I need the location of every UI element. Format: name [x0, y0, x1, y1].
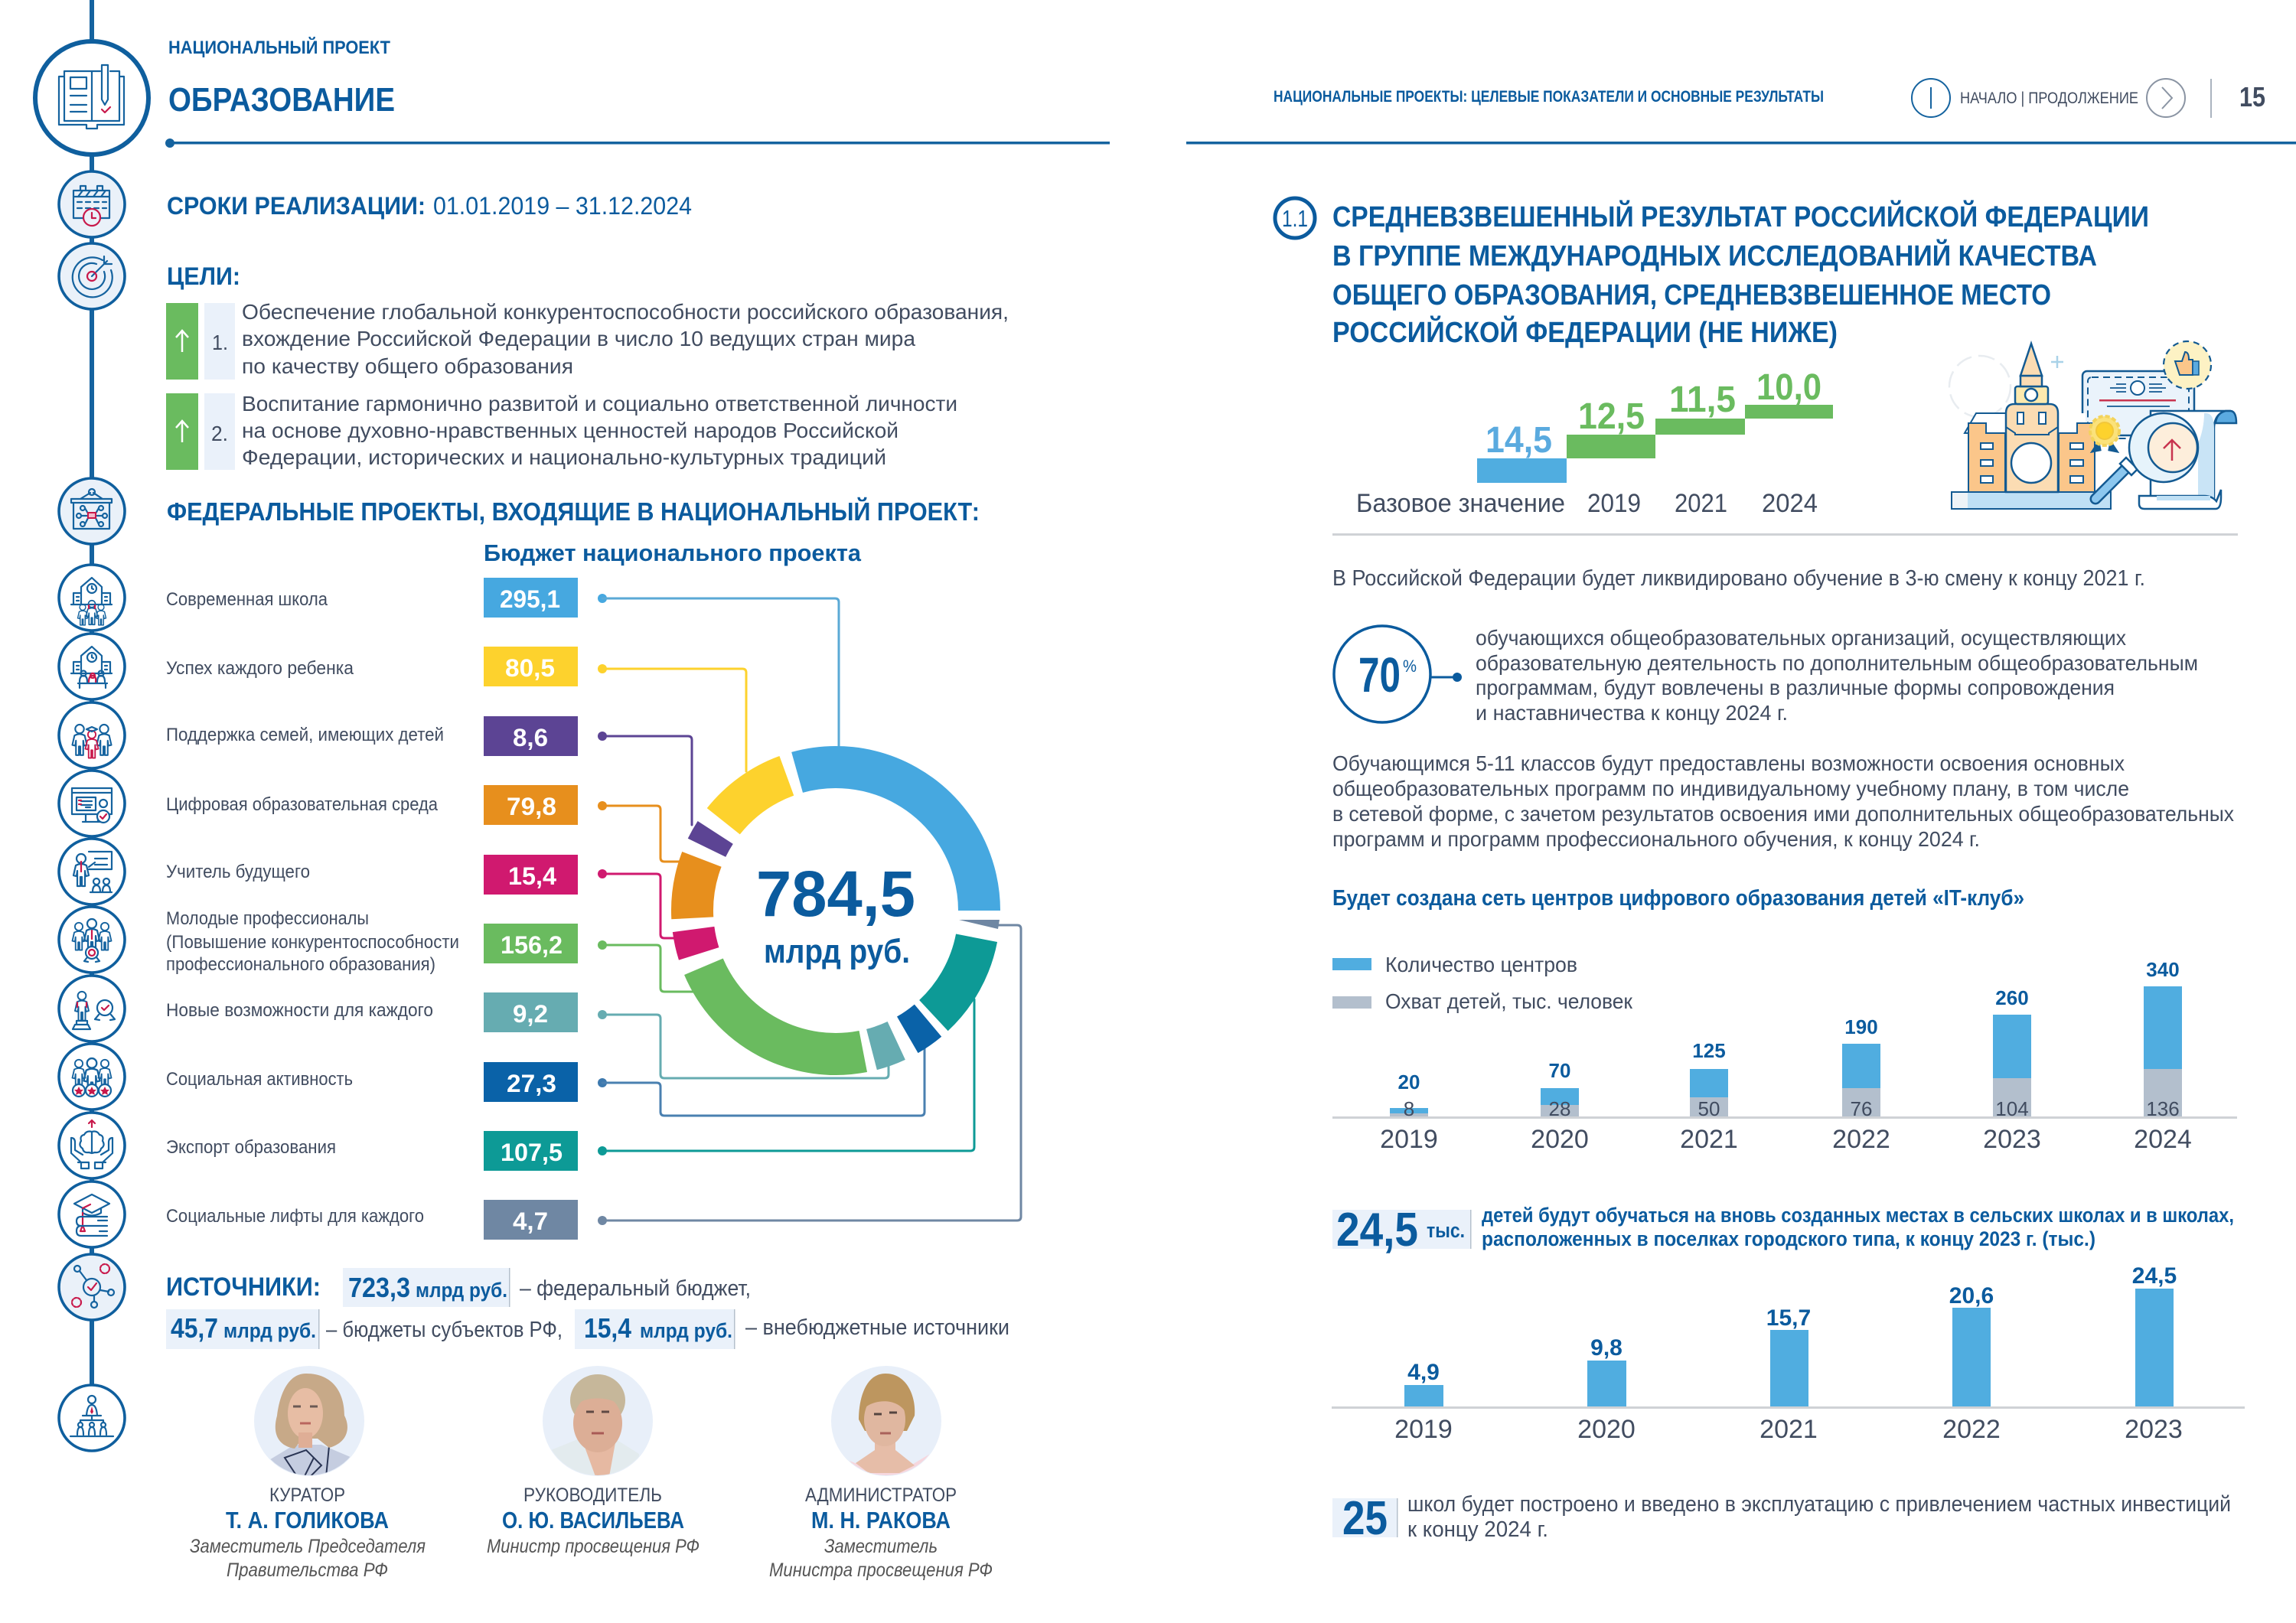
curator caption: КУРАТОР — [269, 1484, 345, 1506]
text: individual curriculum: общеобразовательных программ по индивидуальному учебному плану, в том числе — [1332, 777, 2129, 800]
icon: school with children at table — [59, 634, 125, 699]
curator caption: Правительства РФ — [227, 1559, 388, 1581]
implementation period — [167, 192, 692, 220]
project names: Успех каждого ребенка — [166, 658, 354, 679]
text: individual curriculum: в сетевой форме, с зачетом результатов освоения ими дополнительных общеобразовательных — [1332, 802, 2234, 826]
callout: 24.5 thousand children: расположенных в поселках городского типа, к концу 2023 г. (тыс.) — [1482, 1227, 2095, 1250]
source: regional budgets: млрд руб. — [223, 1319, 316, 1342]
portrait: administrator — [831, 1366, 941, 1476]
budget value boxes: 80,5 — [505, 654, 555, 682]
stacked bar chart: IT-club: 8 — [1404, 1097, 1414, 1120]
callout: 25 schools: к концу 2024 г. — [1407, 1517, 1548, 1542]
header: national project label: НАЦИОНАЛЬНЫЙ ПРОЕКТ — [168, 37, 390, 58]
text: individual curriculum: Обучающимся 5-11 классов будут предоставлены возможности освоения основных — [1332, 751, 2125, 775]
staircase chart: 11,5 — [1669, 380, 1736, 420]
project names: Поддержка семей, имеющих детей — [166, 725, 444, 745]
page number — [2210, 79, 2265, 118]
icon: calendar and clock — [59, 171, 125, 237]
icon: sources network — [59, 1254, 125, 1320]
goal 1 — [166, 300, 1009, 380]
staircase chart: Базовое значение — [1356, 489, 1565, 518]
stacked bar chart: IT-club: 2020 — [1531, 1125, 1589, 1154]
legend — [1332, 953, 1633, 1013]
icon: family with graduate — [59, 702, 125, 768]
callout: 70 percent: 70 — [1358, 647, 1401, 702]
indicator heading — [1332, 199, 2149, 349]
bar chart: rural school places: 20,6 — [1949, 1283, 1994, 1309]
project names: Современная школа — [166, 589, 328, 610]
indicator heading: СРЕДНЕВЗВЕШЕННЫЙ РЕЗУЛЬТАТ РОССИЙСКОЙ ФЕДЕРАЦИИ — [1332, 199, 2149, 233]
stacked bar chart: IT-club: 2021 — [1680, 1125, 1738, 1154]
source: federal budget — [343, 1268, 751, 1307]
project names: Экспорт образования — [166, 1137, 336, 1158]
callout: 70 percent — [1334, 626, 1462, 722]
bar chart: rural school places: 2021 — [1760, 1415, 1818, 1444]
head caption — [487, 1484, 700, 1557]
divider under indicator — [1332, 533, 2238, 536]
bar chart: rural school places: 2023 — [2125, 1415, 2183, 1444]
budget heading: Бюджет национального проекта — [484, 539, 862, 566]
text: third shift elimination: В Российской Федерации будет ликвидировано обучение в 3-ю смену к концу 2021 г. — [1332, 566, 2145, 591]
source: extra-budgetary: 15,4 — [584, 1312, 631, 1344]
administrator caption: Заместитель — [824, 1536, 938, 1557]
project names: Учитель будущего — [166, 862, 310, 882]
staircase chart: 2019 — [1587, 489, 1641, 518]
source: extra-budgetary: – внебюджетные источники — [745, 1315, 1009, 1340]
bar chart: rural school places: 2019 — [1394, 1415, 1453, 1444]
budget value boxes: 156,2 — [501, 931, 563, 959]
goal 1: вхождение Российской Федерации в число 10 ведущих стран мира — [242, 327, 915, 350]
icon: presentation board — [59, 478, 125, 544]
stacked bar chart: IT-club: 125 — [1692, 1039, 1726, 1062]
icon: target with dart — [59, 243, 125, 309]
stacked bar chart: IT-club: 76 — [1851, 1097, 1872, 1120]
budget value boxes: 79,8 — [507, 793, 556, 820]
donut total: млрд руб. — [764, 933, 910, 970]
budget value boxes: 9,2 — [513, 1000, 548, 1028]
staircase chart: 12,5 — [1578, 396, 1645, 437]
sources heading: ИСТОЧНИКИ: — [166, 1273, 321, 1302]
administrator caption: Министра просвещения РФ — [769, 1559, 993, 1581]
source: federal budget: – федеральный бюджет, — [520, 1276, 751, 1301]
callout: 24.5 thousand children: тыс. — [1427, 1219, 1465, 1242]
bar chart: rural school places: 15,7 — [1766, 1305, 1811, 1331]
stacked bar chart: IT-club: 70 — [1549, 1059, 1570, 1082]
donut chart — [634, 709, 1038, 1113]
text: mentoring: обучающихся общеобразовательных организаций, осуществляющих — [1476, 626, 2126, 650]
text: mentoring: образовательную деятельность по дополнительным общеобразовательным — [1476, 651, 2198, 675]
source: extra-budgetary: млрд руб. — [640, 1319, 732, 1342]
callout: 70 percent: % — [1403, 657, 1417, 676]
source: regional budgets: 45,7 — [171, 1312, 218, 1344]
source: regional budgets — [166, 1309, 563, 1349]
goal 1: 1. — [212, 331, 228, 354]
stacked bar chart: IT-club: 20 — [1398, 1071, 1420, 1093]
head caption: О. Ю. ВАСИЛЬЕВА — [502, 1507, 684, 1533]
budget value boxes: 295,1 — [500, 585, 560, 613]
bar chart: rural school places: 24,5 — [2132, 1263, 2177, 1289]
page number: 15 — [2239, 81, 2265, 112]
project names: Социальная активность — [166, 1069, 353, 1090]
icon: open book and pen — [35, 41, 148, 155]
indicator heading: РОССИЙСКОЙ ФЕДЕРАЦИИ (НЕ НИЖЕ) — [1332, 314, 1838, 349]
budget value boxes — [484, 578, 578, 1240]
stacked bar chart: IT-club: 2019 — [1380, 1125, 1438, 1154]
implementation period: 01.01.2019 – 31.12.2024 — [433, 192, 692, 220]
budget value boxes: 4,7 — [513, 1207, 548, 1235]
goal 1: Обеспечение глобальной конкурентоспособности российского образования, — [242, 300, 1009, 324]
curator caption — [190, 1484, 426, 1581]
text: mentoring: программам, будут вовлечены в различные формы сопровождения — [1476, 676, 2115, 699]
icon: digital monitor — [59, 771, 125, 836]
head caption: РУКОВОДИТЕЛЬ — [523, 1484, 662, 1506]
staircase chart: 2024 — [1762, 489, 1818, 518]
bar chart: rural school places: 2022 — [1942, 1415, 2001, 1444]
callout: 25 schools — [1332, 1492, 2231, 1545]
stacked bar chart: IT-club: 28 — [1549, 1097, 1570, 1120]
stacked bar chart: IT-club: 50 — [1698, 1097, 1720, 1120]
staircase chart: 2021 — [1675, 489, 1727, 518]
portrait: curator — [254, 1366, 364, 1476]
budget value boxes: 107,5 — [501, 1139, 563, 1166]
federal projects heading: ФЕДЕРАЛЬНЫЕ ПРОЕКТЫ, ВХОДЯЩИЕ В НАЦИОНАЛЬНЫЙ ПРОЕКТ: — [167, 497, 980, 526]
project names — [166, 589, 459, 1227]
project names: (Повышение конкурентоспособности — [166, 932, 459, 953]
bar chart: rural school places: 9,8 — [1590, 1335, 1623, 1361]
indicator heading: В ГРУППЕ МЕЖДУНАРОДНЫХ ИССЛЕДОВАНИЙ КАЧЕСТВА — [1332, 238, 2097, 272]
legend: Охват детей, тыс. человек — [1385, 989, 1633, 1013]
text: mentoring — [1476, 626, 2198, 725]
stacked bar chart: IT-club: 2022 — [1832, 1125, 1890, 1154]
budget value boxes: 27,3 — [507, 1070, 556, 1097]
source: regional budgets: – бюджеты субъектов РФ, — [326, 1318, 563, 1342]
stacked bar chart: IT-club — [1332, 958, 2237, 1154]
curator caption: Т. А. ГОЛИКОВА — [226, 1507, 389, 1533]
project names: профессионального образования) — [166, 954, 435, 975]
staircase chart — [1356, 367, 1833, 518]
goal 2: Воспитание гармонично развитой и социально ответственной личности — [242, 392, 957, 416]
icon: person on steps with badge — [59, 976, 125, 1041]
callout: 25 schools: 25 — [1342, 1492, 1388, 1545]
indicator heading: ОБЩЕГО ОБРАЗОВАНИЯ, СРЕДНЕВЗВЕШЕННОЕ МЕСТО — [1332, 279, 2051, 311]
icon: team hierarchy — [59, 1385, 125, 1451]
budget value boxes: 15,4 — [508, 862, 556, 890]
stacked bar chart: IT-club: 2023 — [1983, 1125, 2041, 1154]
bar chart: rural school places: 4,9 — [1407, 1360, 1440, 1385]
project names: Цифровая образовательная среда — [166, 794, 439, 815]
budget value boxes: 8,6 — [513, 724, 548, 751]
administrator caption: М. Н. РАКОВА — [811, 1507, 951, 1533]
goal 1: по качеству общего образования — [242, 354, 573, 378]
staircase chart: 10,0 — [1756, 367, 1821, 408]
icon: hands holding brain — [59, 1113, 125, 1178]
source: federal budget: 723,3 — [348, 1272, 410, 1303]
icon: school with pupils — [59, 565, 125, 631]
donut total: 784,5 — [756, 858, 915, 930]
bar chart: rural school places — [1332, 1263, 2245, 1444]
goal 2: Федерации, исторических и национально-культурных традиций — [242, 445, 886, 469]
left navigation spine with icons — [35, 0, 148, 1451]
project names: Молодые профессионалы — [166, 908, 369, 929]
right page running header: НАЦИОНАЛЬНЫЕ ПРОЕКТЫ: ЦЕЛЕВЫЕ ПОКАЗАТЕЛИ И ОСНОВНЫЕ РЕЗУЛЬТАТЫ — [1274, 88, 1824, 106]
head caption: Министр просвещения РФ — [487, 1536, 700, 1557]
title: ОБРАЗОВАНИЕ — [168, 81, 395, 119]
stacked bar chart: IT-club: 136 — [2146, 1097, 2180, 1120]
text: individual curriculum: программ и программ профессионального обучения, к концу 2024 г. — [1332, 827, 1980, 851]
connector lines — [598, 594, 1021, 1225]
source: federal budget: млрд руб. — [416, 1279, 507, 1302]
donut total — [756, 858, 915, 970]
project names: Новые возможности для каждого — [166, 1000, 433, 1021]
IT-club chart heading: Будет создана сеть центров цифрового образования детей «IT-клуб» — [1332, 886, 2024, 911]
goal 2 — [166, 392, 957, 470]
indicator number badge: 1.1 — [1282, 205, 1308, 232]
callout: 24.5 thousand children: 24,5 — [1336, 1204, 1418, 1256]
callout: 24.5 thousand children — [1332, 1204, 2234, 1256]
icon: teacher at board — [59, 839, 125, 904]
stacked bar chart: IT-club: 260 — [1995, 986, 2029, 1009]
curator caption: Заместитель Председателя — [190, 1536, 426, 1557]
icon: group with stars — [59, 1044, 125, 1110]
stacked bar chart: IT-club: 2024 — [2134, 1125, 2192, 1154]
administrator caption: АДМИНИСТРАТОР — [805, 1484, 957, 1506]
text: mentoring: и наставничества к концу 2024 г. — [1476, 701, 1788, 725]
bar chart: rural school places: 2020 — [1577, 1415, 1636, 1444]
portrait: head — [543, 1366, 653, 1476]
administrator caption — [769, 1484, 993, 1581]
header rule left — [165, 139, 1110, 148]
source: extra-budgetary — [575, 1309, 1009, 1349]
indicator number badge — [1275, 198, 1315, 238]
legend: Количество центров — [1385, 953, 1577, 976]
stacked bar chart: IT-club: 104 — [1995, 1097, 2029, 1120]
stacked bar chart: IT-club: 190 — [1844, 1015, 1878, 1038]
icon: graduation cap on books — [59, 1181, 125, 1247]
icon: group with award — [59, 907, 125, 973]
navigation: start and continue — [1912, 79, 2185, 117]
project names: Социальные лифты для каждого — [166, 1206, 424, 1227]
goals heading: ЦЕЛИ: — [167, 262, 240, 290]
stacked bar chart: IT-club: 340 — [2146, 958, 2180, 981]
callout: 25 schools: школ будет построено и введено в эксплуатацию с привлечением частных инвестиций — [1407, 1492, 2231, 1517]
goal 2: 2. — [211, 422, 228, 445]
illustration: university, diploma, magnifier — [1949, 341, 2236, 509]
text: individual curriculum — [1332, 751, 2234, 851]
implementation period: СРОКИ РЕАЛИЗАЦИИ: — [167, 192, 426, 220]
staircase chart: 14,5 — [1486, 420, 1552, 461]
header rule right — [1186, 142, 2296, 144]
goal 2: на основе духовно-нравственных ценностей народов Российской — [242, 419, 899, 442]
navigation: start and continue: НАЧАЛО | ПРОДОЛЖЕНИЕ — [1960, 90, 2138, 107]
